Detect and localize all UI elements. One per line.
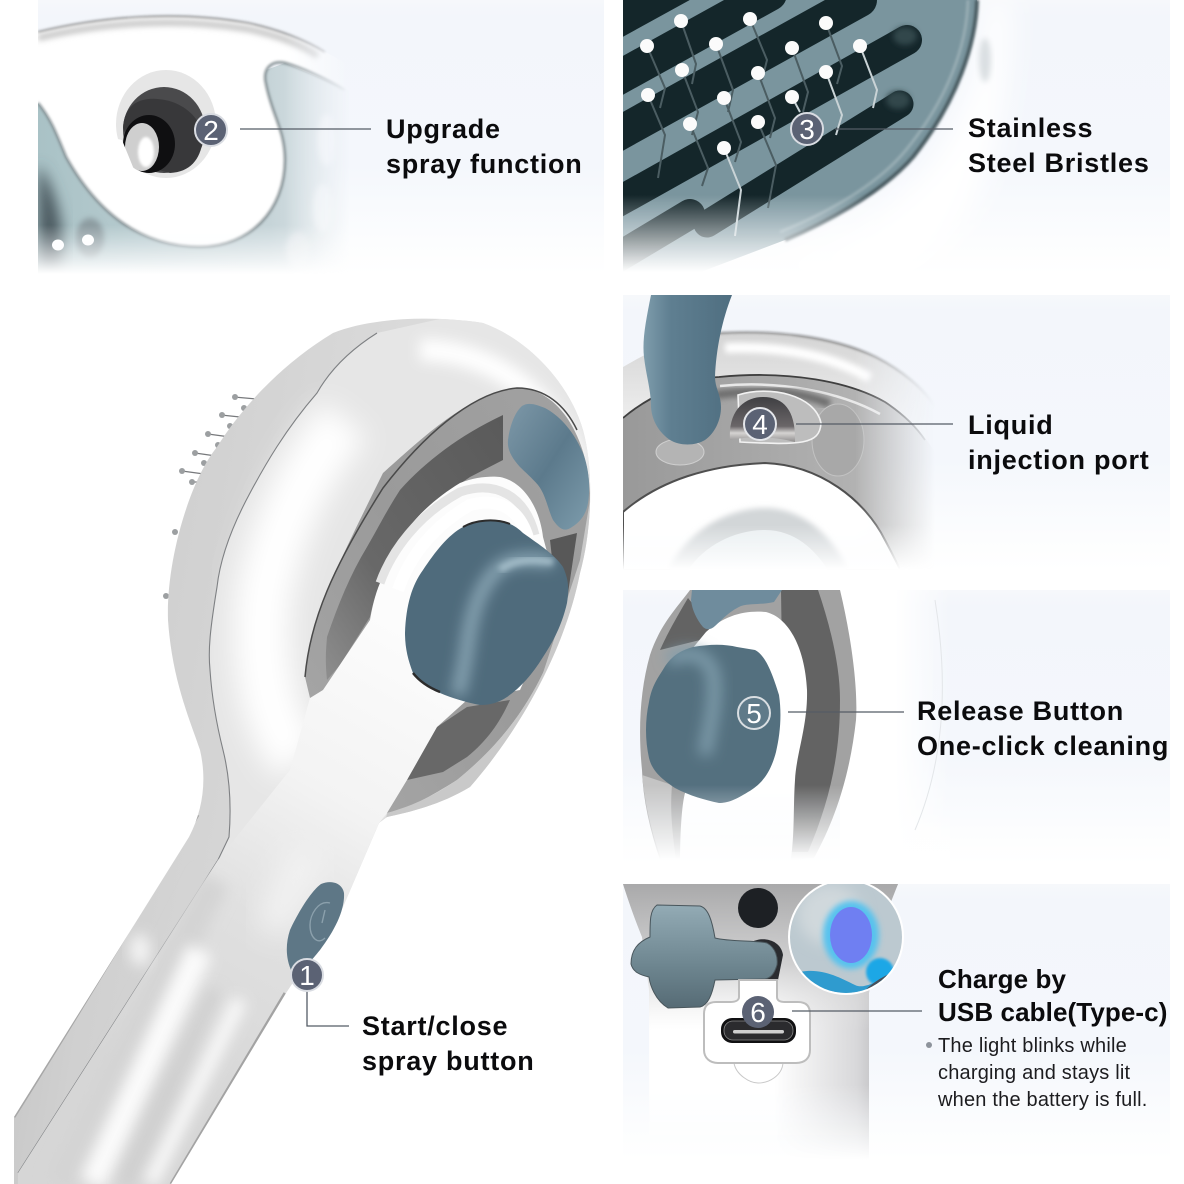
front face bbox=[210, 319, 494, 857]
spray tab bbox=[508, 404, 589, 530]
text: charging light description: charging and stays lit bbox=[938, 1062, 1131, 1084]
outer shell band bbox=[623, 332, 909, 416]
badge 3: 3 bbox=[799, 114, 815, 145]
recess behind spray nozzle bbox=[38, 63, 332, 269]
white hub bbox=[680, 612, 808, 853]
badge 2: 2 bbox=[203, 115, 219, 146]
heading: liquid injection port: injection port bbox=[968, 445, 1150, 475]
callout line 6 bbox=[792, 1010, 922, 1012]
badge 1 bbox=[291, 959, 323, 991]
badge 5 bbox=[738, 697, 770, 729]
heading: release button one-click cleaning bbox=[917, 696, 1169, 761]
heading: stainless steel bristles bbox=[968, 113, 1150, 178]
text: charging light description bbox=[926, 1035, 1148, 1111]
handle body bbox=[649, 884, 898, 1148]
badge 6 bbox=[742, 996, 774, 1028]
magnified indicator light bbox=[788, 879, 905, 1000]
lower crescent bbox=[407, 700, 510, 780]
blue top tab bbox=[691, 590, 782, 629]
callout line 2 bbox=[240, 128, 371, 130]
release button bbox=[646, 645, 780, 803]
USB port plate bbox=[704, 980, 810, 1083]
blue T-shaped latch bbox=[631, 905, 777, 1008]
dark buttons bbox=[738, 888, 783, 980]
callout line 5 bbox=[788, 711, 904, 713]
outer grey ring bbox=[640, 590, 856, 860]
heading: upgrade spray function bbox=[386, 114, 583, 179]
brush silhouette bbox=[14, 319, 590, 1184]
rim of lower ring bbox=[385, 500, 598, 825]
brush body front bbox=[38, 27, 334, 247]
panel: charge by USB bbox=[623, 879, 1170, 1160]
heading: start/close spray button bbox=[362, 1011, 535, 1076]
callout line 3 bbox=[835, 128, 953, 130]
heading: start/close spray button: Start/close bbox=[362, 1011, 508, 1041]
heading: liquid injection port: Liquid bbox=[968, 410, 1053, 440]
heading: stainless steel bristles: Steel Bristles bbox=[968, 148, 1150, 178]
badge 2 bbox=[195, 114, 227, 146]
panel: stainless steel bristles bbox=[600, 0, 1170, 275]
handle shading bbox=[124, 870, 222, 1006]
heading: release button one-click cleaning: One-click cleaning bbox=[917, 731, 1169, 761]
text: charging light description: when the battery is full. bbox=[937, 1089, 1148, 1111]
power button bbox=[287, 882, 344, 972]
badge 5: 5 bbox=[746, 698, 762, 729]
panel: release button bbox=[623, 590, 1170, 865]
heading: charge by USB cable: USB cable(Type-c) bbox=[938, 997, 1168, 1027]
heading: release button one-click cleaning: Release Button bbox=[917, 696, 1124, 726]
badge 3 bbox=[791, 113, 823, 145]
callout line 4 bbox=[796, 423, 953, 425]
bristle plate bbox=[623, 0, 977, 275]
heading: charge by USB cable bbox=[938, 964, 1168, 1027]
heading: start/close spray button: spray button bbox=[362, 1046, 535, 1076]
badge 4: 4 bbox=[752, 409, 768, 440]
white neck bbox=[18, 477, 560, 1184]
white shell glow bbox=[840, 590, 911, 782]
panel: liquid injection port bbox=[623, 295, 1170, 570]
liquid port bbox=[730, 391, 821, 443]
badge 6: 6 bbox=[750, 997, 766, 1028]
main product: brush bbox=[14, 300, 600, 1184]
heading: stainless steel bristles: Stainless bbox=[968, 113, 1093, 143]
white glow beside brush bbox=[931, 52, 997, 194]
callout line 1 bbox=[307, 990, 349, 1026]
panel: upgrade spray function bbox=[38, 0, 604, 275]
heading: charge by USB cable: Charge by bbox=[938, 964, 1066, 994]
inner white hub bbox=[623, 463, 900, 570]
ring cavity bbox=[305, 388, 590, 813]
heading: upgrade spray function: spray function bbox=[386, 149, 583, 179]
badge 4 bbox=[744, 408, 776, 440]
stems bbox=[647, 19, 842, 208]
spray nozzle bbox=[116, 70, 215, 178]
dark band bbox=[781, 590, 840, 852]
badge 1: 1 bbox=[299, 960, 315, 991]
heading: liquid injection port bbox=[968, 410, 1150, 475]
slots bbox=[600, 0, 907, 268]
release button (front) bbox=[405, 520, 568, 705]
heading: upgrade spray function: Upgrade bbox=[386, 114, 501, 144]
dark inner band bbox=[326, 415, 503, 680]
blue tab bbox=[643, 295, 732, 444]
bristle tips bbox=[640, 12, 867, 155]
text: charging light description: The light blinks while bbox=[938, 1035, 1127, 1057]
bristles seen from side bbox=[163, 394, 256, 599]
cavity ring bbox=[623, 376, 922, 538]
